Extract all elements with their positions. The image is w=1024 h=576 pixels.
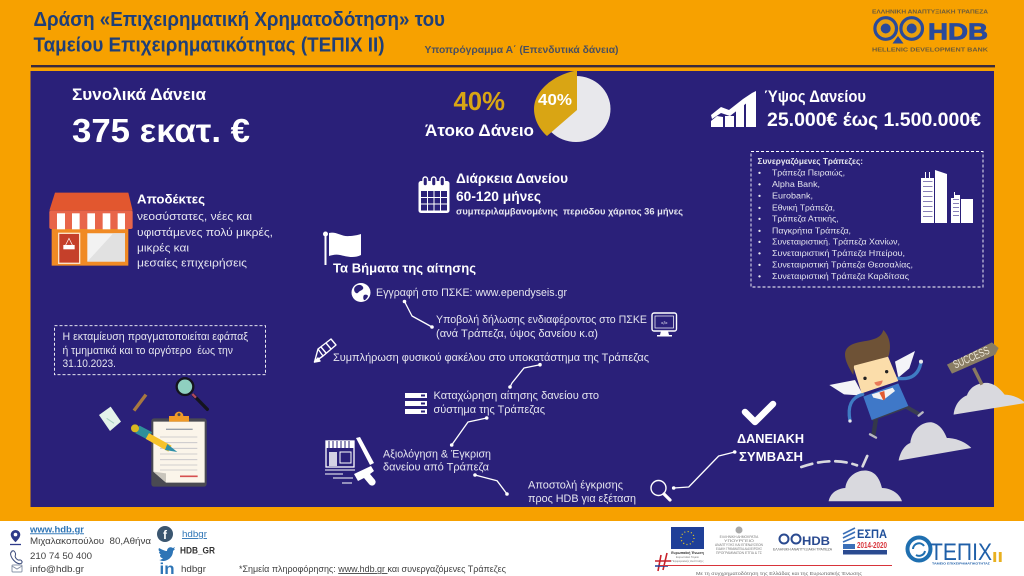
- torso: [863, 383, 908, 420]
- bank list: •: [758, 237, 761, 247]
- logo: European Union: Ευρωπαϊκή Ένωση: [671, 551, 704, 555]
- icon: magnifier: [651, 480, 670, 500]
- stat: total loans: [72, 85, 250, 149]
- connector 5: [672, 450, 736, 490]
- pen: [131, 424, 177, 452]
- stat: loan amount: 25.000€ έως 1.500.000€: [767, 109, 981, 131]
- icon: server: [405, 393, 427, 414]
- stat: loan amount: [711, 88, 981, 131]
- step 3: physical file: Συμπλήρωση φυσικού φακέλου στο υποκατάστημα της Τράπεζας: [333, 352, 649, 364]
- sign: success: [947, 342, 999, 385]
- bank list: •: [758, 214, 761, 224]
- panel: partner banks: Συνεργαζόμενες Τράπεζες:: [758, 156, 863, 166]
- subtitle: Υποπρόγραμμα Α΄ (Επενδυτικά δάνεια): [424, 44, 618, 56]
- contact details: 210 74 50 400: [30, 551, 92, 562]
- title: Ταμείου Επιχειρηματικότητας (ΤΕΠΙΧ II): [34, 34, 384, 56]
- connector 2: [508, 363, 542, 389]
- title: Δράση «Επιχειρηματική Χρηματοδότηση» του: [34, 8, 445, 31]
- icon: monitor: </>: [661, 320, 668, 326]
- bank list: •: [758, 179, 761, 189]
- logo: HDB small: ΕΛΛΗΝΙΚΗ ΑΝΑΠΤΥΞΙΑΚΗ ΤΡΑΠΕΖΑ: [773, 548, 833, 552]
- connector 3: [450, 416, 489, 447]
- contact details: info@hdb.gr: [30, 564, 84, 575]
- main panel: [30, 71, 994, 507]
- icon: check mark: [745, 404, 773, 422]
- logo: ESPA: ΕΣΠΑ: [857, 529, 887, 541]
- stat: total loans: 375 εκατ. €: [72, 112, 250, 149]
- icon: mail: [12, 565, 22, 572]
- steps of the application: [314, 232, 736, 505]
- bank list: •: [758, 271, 761, 281]
- step 4: application entry: Καταχώρηση αίτησης δανείου στο: [434, 390, 599, 402]
- logo: ministry: ΕΛΛΗΝΙΚΗ ΔΗΜΟΚΡΑΤΙΑ: [720, 535, 759, 539]
- connector 1: [403, 300, 434, 329]
- logo: TEPIX II: ΤΑΜΕΙΟ ΕΠΙΧΕΙΡΗΜΑΤΙΚΟΤΗΤΑΣ: [932, 562, 990, 566]
- divider line: [31, 65, 995, 67]
- bank list: Εθνική Τράπεζα,: [772, 202, 835, 212]
- step 3: physical file: [314, 339, 649, 364]
- icon: calendar: [418, 177, 450, 213]
- recipients: υφιστάμενες πολύ μικρές,: [137, 227, 273, 239]
- final step: loan agreement: [737, 404, 804, 464]
- logo: HDB small: [773, 534, 833, 552]
- social media: HDB_GR: [180, 546, 215, 556]
- illustration: clipboard, pen and magnifier: [99, 378, 207, 487]
- logo: European Union: [671, 527, 704, 563]
- panel: partner banks: [751, 152, 983, 287]
- icon: twitter: [159, 547, 175, 561]
- icon: globe: [352, 283, 370, 302]
- bank list: Συνεταιριστική Τράπεζα Καρδίτσας: [772, 271, 909, 281]
- bank list: Alpha Bank,: [772, 179, 820, 189]
- logo: ministry: ΑΝΑΠΤΥΞΗΣ ΚΑΙ ΕΠΕΝΔΥΣΕΩΝ: [715, 543, 764, 547]
- bank list: •: [758, 248, 761, 258]
- logo: European Union: Ευρωπαϊκό Ταμείο: [676, 555, 699, 559]
- step 6: approval sent to HDB: [528, 480, 670, 505]
- logo: TEPIX II: II: [992, 549, 1003, 566]
- clouds: [829, 383, 1024, 501]
- bank list: [758, 168, 913, 281]
- magnifier: [177, 378, 207, 409]
- logo: HDB small: HDB: [802, 536, 830, 548]
- recipients: Αποδέκτες: [137, 192, 205, 206]
- step 1: registration: Εγγραφή στο ΠΣΚΕ: www.ependyseis.gr: [376, 287, 567, 299]
- recipients: μεσαίες επιχειρήσεις: [137, 258, 247, 270]
- logo: ministry: [715, 526, 764, 555]
- loan duration: [418, 170, 683, 217]
- social media: [157, 526, 215, 576]
- hair: [845, 330, 890, 375]
- bank list: Συνεταιριστική Τράπεζα Ηπείρου,: [772, 248, 905, 258]
- clipboard: [151, 412, 207, 487]
- header: [34, 8, 989, 56]
- stat: interest free share with pie chart: Άτοκο Δάνειο: [425, 122, 534, 140]
- contact details: [10, 524, 152, 575]
- recipients: [49, 192, 273, 270]
- icon: buildings: [921, 170, 973, 223]
- pie chart: 40%: [538, 92, 572, 109]
- connector 4: [473, 473, 509, 496]
- callout: disbursement: 31.10.2023.: [62, 358, 116, 370]
- footer: [10, 524, 1003, 576]
- step 5: evaluation and approval: [325, 437, 491, 486]
- stat: interest free share with pie chart: 40%: [454, 86, 505, 116]
- title: [34, 8, 445, 56]
- recipients: νεοσύστατες, νέες και: [137, 211, 253, 223]
- step 6: approval sent to HDB: προς HDB για εξέταση: [528, 493, 636, 505]
- logo: hashtag and red line: [655, 553, 892, 571]
- icon: location pin: [10, 530, 21, 544]
- icon: shop: [49, 193, 133, 266]
- callout: disbursement: Η εκταμίευση πραγματοποιείται εφάπαξ: [62, 331, 248, 343]
- social media: hdbgr: [182, 529, 207, 539]
- logo: ESPA: [843, 528, 887, 554]
- step 2: expression of interest: Υποβολή δήλωσης ενδιαφέροντος στο ΠΣΚΕ: [436, 314, 647, 326]
- icon: flag: [323, 232, 361, 265]
- recipients: μικρές και: [137, 242, 190, 254]
- bank list: Eurobank,: [772, 190, 813, 200]
- stat: total loans: Συνολικά Δάνεια: [72, 85, 207, 104]
- logo: ministry: ΠΡΟΓΡΑΜΜΑΤΩΝ ΕΤΠΑ & ΤΣ: [716, 551, 762, 555]
- face: [863, 370, 888, 386]
- step 2: expression of interest: (ανά Τράπεζα, ύψος δανείου κ.α): [436, 328, 598, 340]
- step 6: approval sent to HDB: Αποστολή έγκρισης: [528, 480, 623, 492]
- illustration: clouds and success sign: [801, 342, 1024, 501]
- step 2: expression of interest: [436, 313, 676, 340]
- pie chart: [534, 70, 610, 142]
- loan duration: 60-120 μήνες: [456, 188, 541, 204]
- final step: loan agreement: ΣΥΜΒΑΣΗ: [739, 449, 803, 464]
- callout: disbursement: ή τμηματικά και το αργότερο έως την: [62, 345, 233, 357]
- icon: bank and stamp: [325, 437, 376, 486]
- wings: [895, 351, 915, 378]
- step 5: evaluation and approval: δανείου από Τράπεζα: [383, 462, 490, 474]
- bank list: Τράπεζα Αττικής,: [772, 214, 839, 224]
- pencil: [134, 395, 146, 411]
- HDB logo: [872, 10, 989, 54]
- HDB logo: HDB: [928, 18, 988, 44]
- icon: facebook: f: [163, 528, 168, 542]
- bank list: •: [758, 225, 761, 235]
- sign: success: SUCCESS: [952, 345, 992, 371]
- step 5: evaluation and approval: Αξιολόγηση & Έγκριση: [383, 448, 491, 460]
- step 4: application entry: [405, 390, 599, 416]
- bank list: Παγκρήτια Τράπεζα,: [772, 225, 851, 235]
- logo: ministry: ΕΙΔΙΚΗ ΓΡΑΜΜΑΤΕΙΑ ΔΙΑΧΕΙΡΙΣΗΣ: [716, 547, 762, 551]
- logo: ESPA: 2014-2020: [857, 540, 887, 550]
- final step: loan agreement: ΔΑΝΕΙΑΚΗ: [737, 431, 804, 446]
- bank list: Συνεταιριστική. Τράπεζα Χανίων,: [772, 237, 900, 247]
- note: [99, 407, 121, 431]
- social media: hdbgr: [181, 564, 206, 574]
- icon: pencil: [314, 339, 336, 362]
- loan duration: συμπεριλαμβανομένης περιόδου χάριτος 36 μήνες: [456, 207, 683, 217]
- HDB logo: HELLENIC DEVELOPMENT BANK: [872, 48, 989, 54]
- bank list: Συνεταιριστική Τράπεζα Θεσσαλίας,: [772, 260, 913, 270]
- head: [853, 353, 898, 393]
- sponsor logos: [655, 526, 1003, 576]
- step 1: registration: [352, 283, 567, 302]
- stat: interest free share with pie chart: [425, 70, 610, 142]
- stat: loan amount: Ύψος Δανείου: [764, 88, 866, 106]
- bank list: •: [758, 202, 761, 212]
- dashed jump path: [801, 451, 869, 467]
- loan duration: Διάρκεια Δανείου: [456, 170, 568, 186]
- icon: phone: [11, 551, 22, 564]
- logo: ministry: ΥΠΟΥΡΓΕΙΟ: [724, 539, 755, 543]
- callout: disbursement: [54, 326, 266, 375]
- contact details: Μιχαλακοπούλου 80,Αθήνα: [30, 536, 152, 546]
- icon: growth chart: [711, 91, 756, 127]
- illustration: flying businessman: [829, 330, 923, 438]
- legs: [873, 419, 876, 436]
- logo: European Union: Περιφερειακής Ανάπτυξης: [671, 559, 704, 563]
- step 4: application entry: σύστημα της Τράπεζας: [434, 404, 545, 416]
- information points note: *Σημεία πληροφόρησης: www.hdb.gr και συνεργαζόμενες Τράπεζες: [239, 564, 506, 574]
- bank list: Τράπεζα Πειραιώς,: [772, 168, 845, 178]
- logo: TEPIX II: ΤΕΠΙΧ: [930, 539, 992, 566]
- icon: monitor: [652, 313, 676, 336]
- steps heading: Τα Βήματα της αίτησης: [333, 261, 476, 276]
- HDB logo: ΕΛΛΗΝΙΚΗ ΑΝΑΠΤΥΞΙΑΚΗ ΤΡΑΠΕΖΑ: [872, 10, 989, 16]
- bank list: •: [758, 190, 761, 200]
- bank list: •: [758, 168, 761, 178]
- bank list: •: [758, 260, 761, 270]
- arms: [849, 394, 863, 421]
- contact details: www.hdb.gr: [29, 524, 84, 534]
